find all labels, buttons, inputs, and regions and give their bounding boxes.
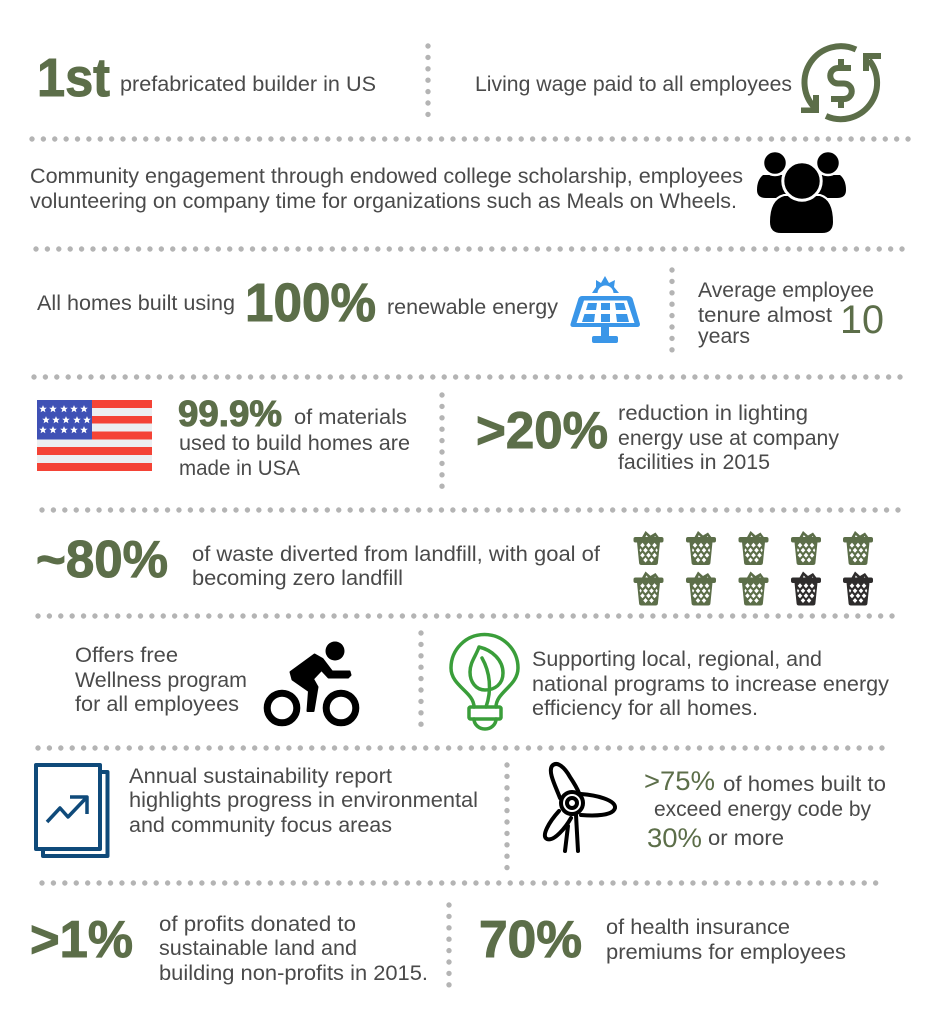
icon: dollar cycle — [801, 46, 881, 119]
panel: lighting energy — [476, 402, 840, 474]
stat: >75%: >75% — [644, 766, 715, 796]
icon: wind turbine — [545, 764, 615, 851]
text: lighting reduction: facilities in 2015 — [618, 451, 770, 474]
text: homes built: or more — [708, 827, 784, 850]
text: annual report: and community focus areas — [129, 814, 392, 837]
text: health insurance: premiums for employees — [606, 941, 846, 964]
text: lighting reduction — [618, 402, 840, 474]
text: average employee tenure — [698, 279, 874, 348]
text: homes built: of homes built to — [723, 773, 886, 796]
panel: waste diverted — [36, 531, 873, 606]
text: wellness: for all employees — [75, 693, 239, 716]
text: average employee tenure: tenure almost — [698, 304, 832, 327]
stat: 99.9%: 99.9% — [178, 393, 282, 434]
text: supporting programs: efficiency for all homes. — [532, 697, 758, 720]
text: community engagement: Community engagement through endowed college scholarship, employees — [30, 165, 743, 188]
stat: 10: 10 — [840, 298, 884, 342]
icon: trash bins — [634, 531, 873, 606]
text: supporting programs: national programs to increase energy — [532, 673, 890, 696]
text: waste: of waste diverted from landfill, with goal of — [192, 543, 600, 566]
icon: US flag — [37, 400, 152, 471]
panel: community engagement — [30, 151, 846, 234]
text: profits: building non-profits in 2015. — [159, 962, 428, 985]
text: supporting programs: Supporting local, regional, and — [532, 648, 822, 671]
panel: renewable energy — [37, 273, 640, 343]
panel: employee tenure — [698, 279, 884, 348]
icon: people — [757, 151, 846, 234]
text: materials: used to build homes are — [179, 432, 410, 455]
text: wellness: Offers free — [75, 644, 178, 667]
icon: cyclist — [267, 642, 356, 723]
text: wellness: Wellness program — [75, 669, 247, 692]
panel: energy efficiency programs — [451, 634, 890, 729]
icon: report chart — [36, 765, 108, 856]
stat: 70%: 70% — [479, 911, 582, 969]
text: lighting reduction: energy use at company — [618, 427, 840, 450]
text: wellness — [75, 644, 247, 716]
panel: wellness program — [75, 642, 356, 723]
panel: materials made in USA — [37, 393, 410, 480]
text: materials — [179, 406, 410, 480]
stat: ~80%: ~80% — [36, 531, 168, 589]
text: prefabricated builder: prefabricated builder in US — [120, 73, 376, 96]
text: community engagement — [30, 165, 743, 213]
text: community engagement: volunteering on company time for organizations such as Meals on Wheels. — [30, 190, 737, 213]
text: health insurance — [606, 916, 846, 964]
text: average employee tenure: years — [698, 325, 750, 348]
text: profits: sustainable land and — [159, 937, 357, 960]
text: all homes built using: All homes built using — [37, 292, 235, 315]
text: lighting reduction: reduction in lighting — [618, 402, 808, 425]
text: annual report: highlights progress in environmental — [129, 789, 478, 812]
panel: health insurance — [479, 911, 846, 969]
stat: 30%: 30% — [647, 823, 702, 853]
stat: 1st: 1st — [37, 48, 110, 108]
text: health insurance: of health insurance — [606, 916, 790, 939]
text: materials: made in USA — [179, 457, 300, 480]
panel: profits donated — [30, 911, 428, 985]
text: annual report — [129, 765, 478, 837]
panel: first prefabricated builder — [37, 48, 376, 108]
text: profits: of profits donated to — [159, 913, 356, 936]
text: profits — [159, 913, 428, 985]
text: living wage: Living wage paid to all employees — [475, 73, 792, 96]
text: supporting programs — [532, 648, 890, 720]
text: homes built: exceed energy code by — [654, 798, 871, 821]
text: renewable energy: renewable energy — [387, 296, 559, 319]
icon: solar panel — [570, 276, 640, 343]
stat: >20%: >20% — [476, 402, 608, 460]
text: materials: of materials — [294, 406, 407, 429]
panel: sustainability report — [36, 765, 478, 856]
icon: leaf light bulb — [451, 634, 518, 729]
text: homes built — [654, 773, 886, 850]
stat: 100%: 100% — [245, 273, 376, 333]
stat: >1%: >1% — [30, 911, 133, 969]
panel: homes exceed energy code — [545, 764, 886, 853]
panel: living wage — [475, 46, 881, 119]
text: average employee tenure: Average employee — [698, 279, 874, 302]
text: waste: becoming zero landfill — [192, 567, 403, 590]
text: annual report: Annual sustainability report — [129, 765, 392, 788]
text: waste — [192, 543, 600, 590]
